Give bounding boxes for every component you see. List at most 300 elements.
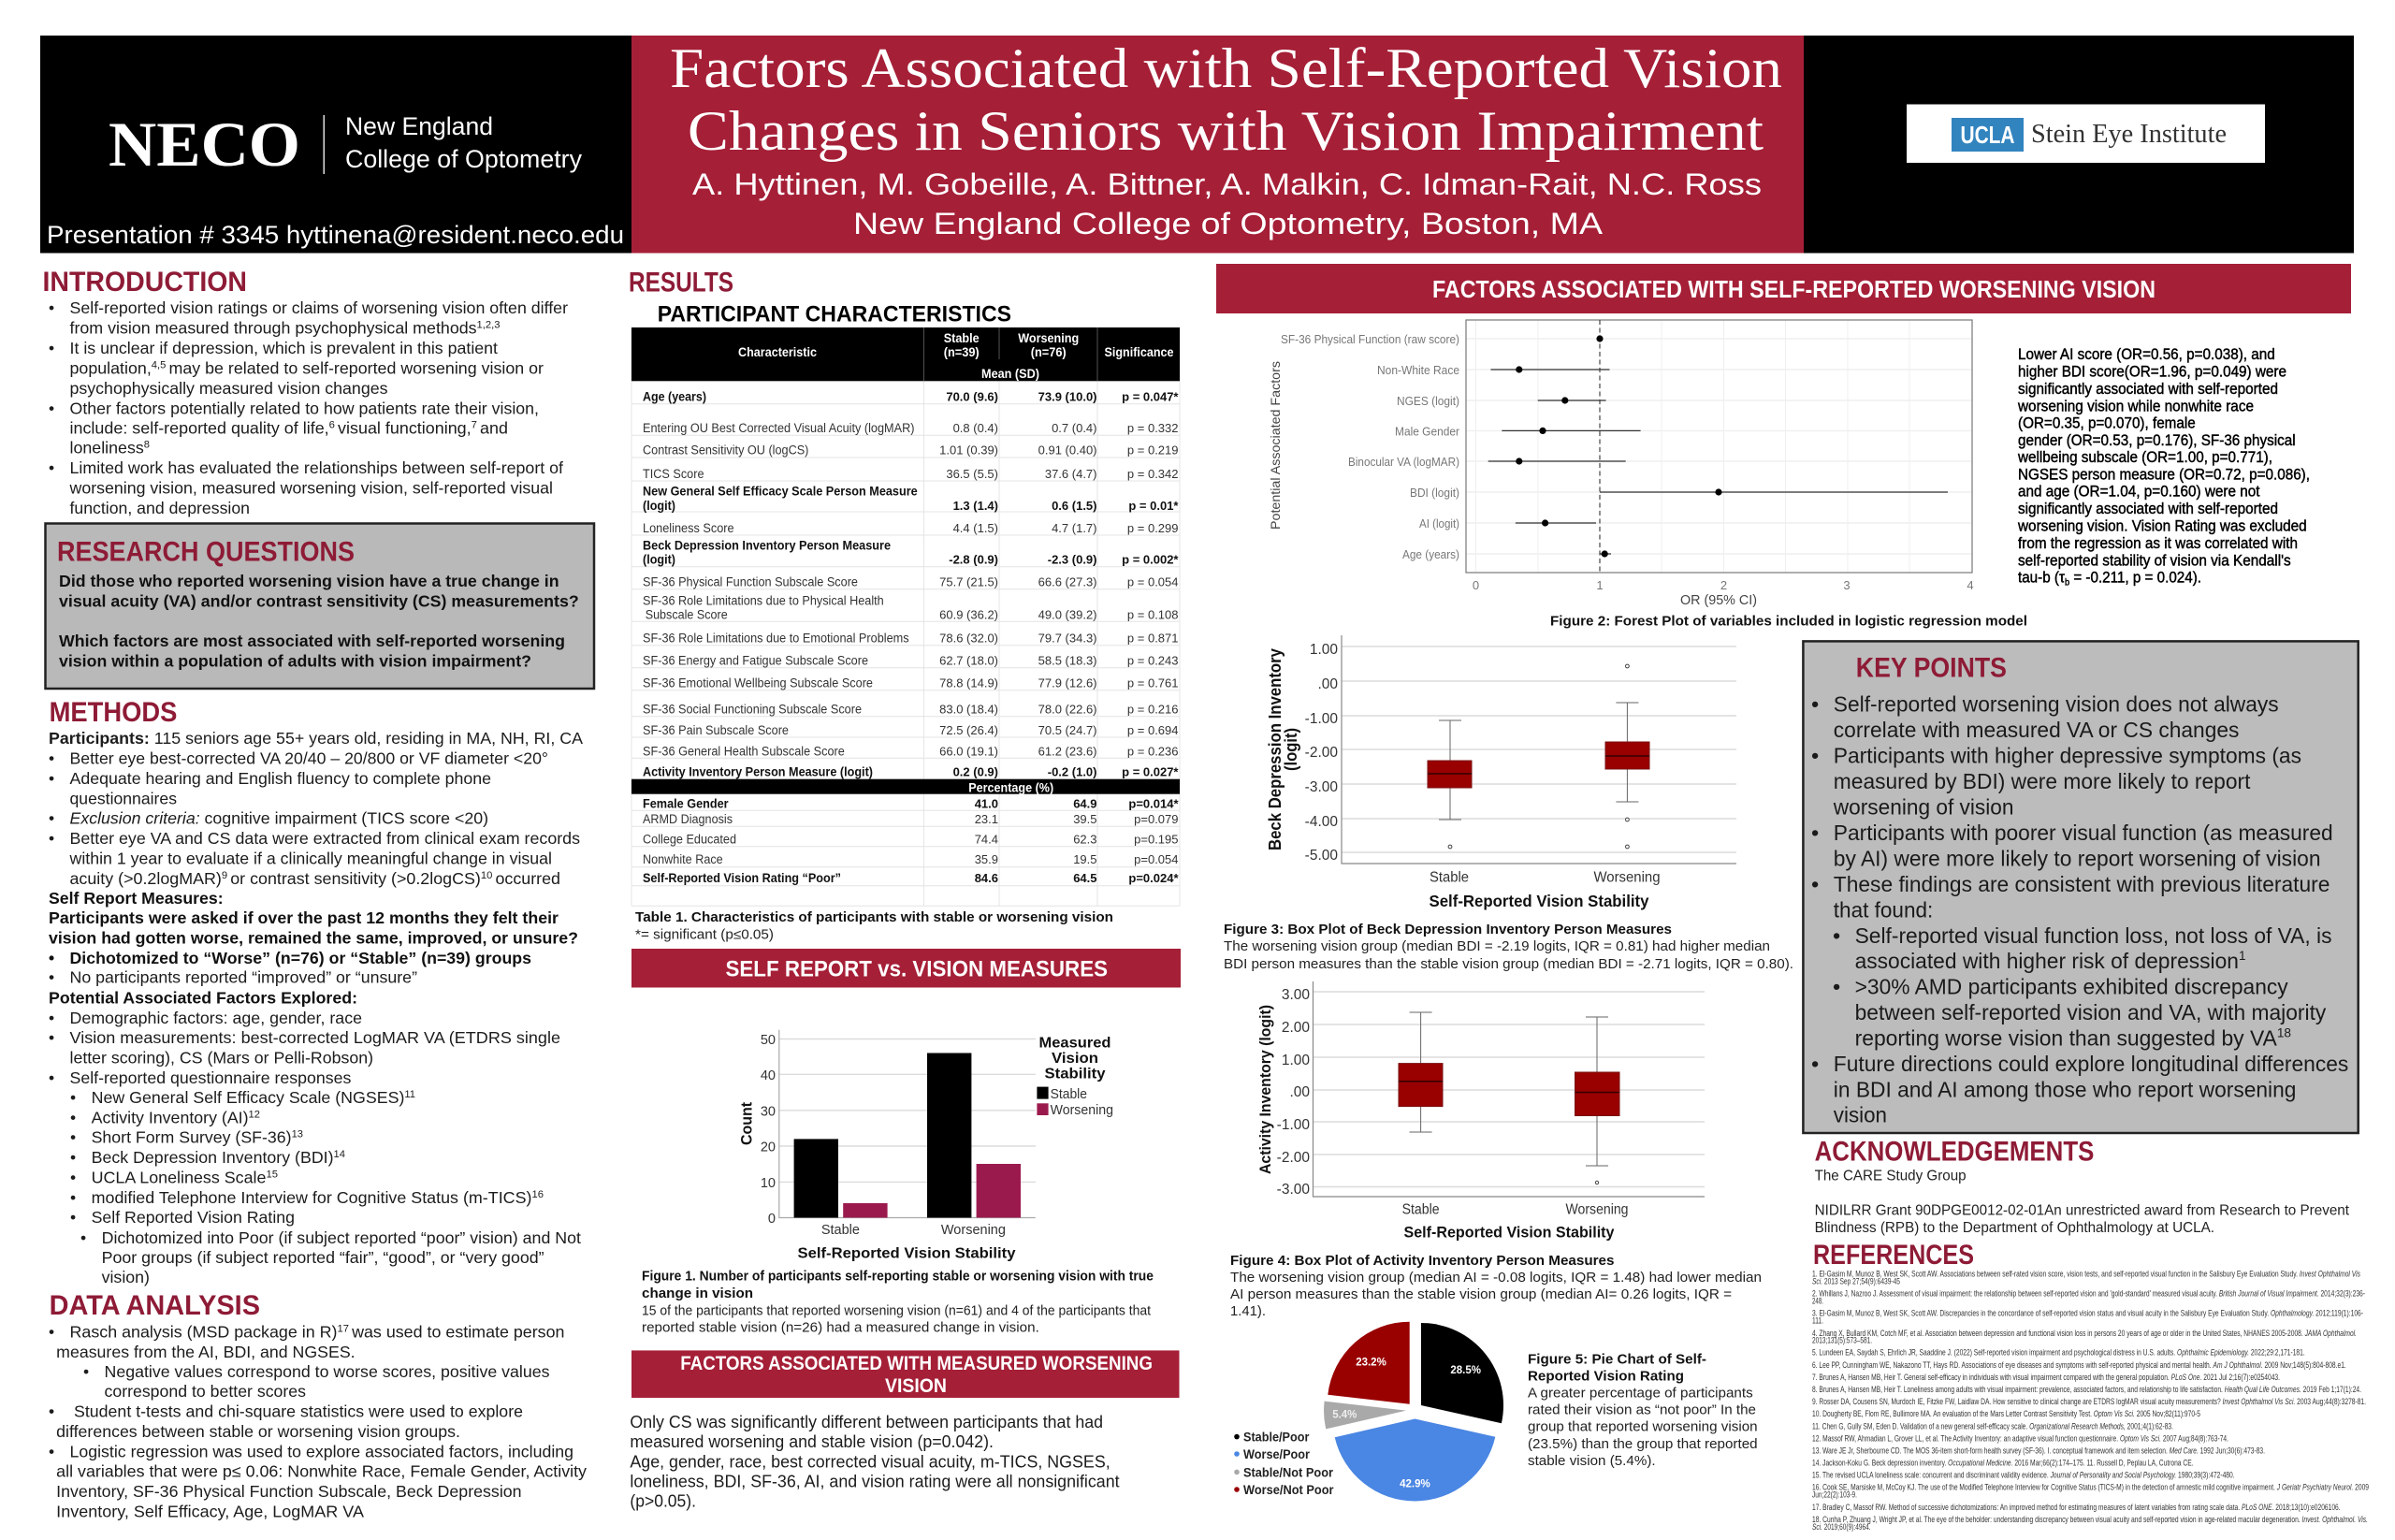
x axis title: Self-Reported Vision Stability bbox=[1403, 1224, 1615, 1241]
factor labels: SF-36 Physical Function (raw score) bbox=[1281, 332, 1459, 346]
banner: factors associated with self-reported worsening vision bbox=[1216, 264, 2351, 313]
methods text: within 1 year to evaluate if a clinically meaningful change in visual bbox=[68, 850, 552, 868]
methods text: • bbox=[49, 769, 54, 788]
table rows: mean values: SF-36 Role Limitations due to Emotional Problems bbox=[643, 631, 909, 645]
figure 4 caption: Figure 4: Box Plot of Activity Inventory Person Measures bbox=[1230, 1254, 1615, 1269]
regression findings text: significantly associated with self-reported bbox=[2018, 501, 2278, 517]
references list: 248. bbox=[1812, 1297, 1823, 1307]
heading: research questions: RESEARCH QUESTIONS bbox=[57, 537, 355, 567]
heading: data analysis: DATA ANALYSIS bbox=[50, 1290, 260, 1321]
key points bullets: between self-reported vision and VA, with majority bbox=[1855, 1000, 2327, 1024]
table rows: mean values: p = 0.219 bbox=[1127, 443, 1179, 458]
x labels: Worsening bbox=[1566, 1201, 1628, 1218]
header banner bbox=[40, 36, 2354, 253]
table rows: percentages: 23.1 bbox=[975, 812, 998, 826]
table rows: mean values: SF-36 Pain Subscale Score bbox=[643, 723, 789, 737]
UCLA Stein Eye Institute logo bbox=[1907, 105, 2265, 163]
table band: percentage: Percentage (%) bbox=[968, 780, 1053, 795]
table rows: mean values: 78.0 (22.6) bbox=[1038, 702, 1096, 716]
methods text: 9 bbox=[222, 870, 230, 881]
data analysis text: differences between stable or worsening vision groups. bbox=[56, 1422, 460, 1441]
table rows: percentages: College Educated bbox=[643, 833, 736, 847]
references list: 14. Jackson-Koku G. Beck depression inventory. Occupational Medicine. 2016 Mar;66(2):174–175. 11. Russell D, Peplau LA, Cutrona CE. bbox=[1812, 1458, 2193, 1468]
figure 4 caption: AI person measures than the stable vision group (median AI= 0.26 logits, IQR = bbox=[1230, 1287, 1732, 1302]
data analysis text: • bbox=[49, 1322, 54, 1341]
methods text: • bbox=[70, 1088, 76, 1107]
table rows: mean values: 70.5 (24.7) bbox=[1038, 723, 1096, 737]
references list: 6. Lee PP, Cunningham WE, Nakazono TT, Hays RD. Associations of eye diseases and symptoms with self-reported physical and mental health. Am J Ophthalmol. 2009 Nov;148(5):804-808.e1. bbox=[1812, 1360, 2346, 1371]
key points bullets: 1 bbox=[2239, 948, 2246, 963]
introduction bullets: psychophysically measured vision changes bbox=[69, 379, 388, 398]
x labels: Stable bbox=[1402, 1201, 1440, 1218]
slice labels: 42.9% bbox=[1400, 1479, 1430, 1490]
UCLA Stein Eye Institute logo: Stein Eye Institute bbox=[2031, 120, 2227, 149]
methods text: • bbox=[70, 1168, 76, 1186]
table rows: percentages: Female Gender bbox=[643, 796, 729, 810]
table rows: mean values: 4.4 (1.5) bbox=[953, 521, 998, 535]
slice labels: 23.2% bbox=[1356, 1358, 1386, 1369]
axis tick labels bbox=[761, 1033, 776, 1227]
factor labels: BDI (logit) bbox=[1410, 486, 1459, 500]
x tick labels: 3 bbox=[1843, 578, 1851, 592]
methods text: • bbox=[70, 1128, 76, 1147]
table rows: percentages: 84.6 bbox=[975, 871, 998, 885]
panel: acknowledgements bbox=[1815, 1137, 2350, 1236]
methods text: occurred bbox=[495, 869, 560, 888]
box: stable bbox=[1428, 720, 1472, 849]
key points bullets: Participants with poorer visual function (as measured bbox=[1834, 821, 2333, 845]
introduction bullets: • bbox=[49, 339, 54, 357]
factor labels: Age (years) bbox=[1402, 547, 1459, 561]
regression findings text: NGSES person measure (OR=0.72, p=0.086), bbox=[2018, 467, 2310, 484]
key points bullets: • bbox=[1811, 692, 1819, 717]
introduction bullets: Self-reported vision ratings or claims of worsening vision often differ bbox=[69, 298, 568, 317]
references list: Sci. 2019;60(9):4964. bbox=[1812, 1522, 1871, 1533]
panel: key points bbox=[1803, 641, 2359, 1133]
table rows: mean values: p = 0.871 bbox=[1127, 631, 1179, 645]
methods text: Dichotomized to “Worse” (n=76) or “Stable” (n=39) groups bbox=[69, 949, 531, 967]
introduction bullets: Other factors potentially related to how patients rate their vision, bbox=[69, 399, 539, 417]
references list: 13. Ware JE Jr, Sherbourne CD. The MOS 36-item short-form health survey (SF-36). I. conceptual framework and item selection. Med Care. 1992 Jun;30(6):473-83. bbox=[1812, 1446, 2265, 1456]
table rows: mean values: p = 0.027* bbox=[1122, 764, 1179, 778]
table rows: mean values: p = 0.054 bbox=[1127, 575, 1179, 589]
banner: self report vs vision measures bbox=[631, 949, 1181, 988]
figure 3 caption: The worsening vision group (median BDI = -2.19 logits, IQR = 0.81) had higher median bbox=[1224, 939, 1770, 954]
category labels: Stable bbox=[821, 1223, 860, 1238]
key points bullets: reporting worse vision than suggested by VA bbox=[1855, 1025, 2288, 1050]
axis title: count: Count bbox=[737, 1102, 756, 1145]
presentation number and email: Presentation # 3345 hyttinena@resident.neco.edu bbox=[47, 221, 624, 249]
measured worsening findings text: Age, gender, race, best corrected visual acuity, m-TICS, NGSES, bbox=[630, 1452, 1110, 1471]
x labels: Worsening bbox=[1594, 870, 1660, 885]
methods text: 14 bbox=[334, 1149, 345, 1160]
heading: introduction: INTRODUCTION bbox=[43, 267, 247, 298]
factor labels: Non-White Race bbox=[1377, 363, 1459, 377]
forest plot bbox=[1268, 320, 1974, 608]
factor labels: Male Gender bbox=[1395, 424, 1460, 438]
introduction bullets: population, bbox=[69, 358, 150, 377]
x tick labels bbox=[1473, 578, 1974, 592]
table rows: mean values: 60.9 (36.2) bbox=[939, 608, 998, 622]
table rows: mean values: 78.8 (14.9) bbox=[939, 676, 998, 690]
heading: acknowledgements: ACKNOWLEDGEMENTS bbox=[1815, 1137, 2094, 1168]
y tick labels: -3.00 bbox=[1305, 779, 1338, 795]
x tick labels: 2 bbox=[1720, 578, 1727, 592]
y tick labels: 1.00 bbox=[1282, 1053, 1310, 1068]
acknowledgements text: Blindness (RPB) to the Department of Ophthalmology at UCLA. bbox=[1815, 1220, 2214, 1236]
methods text: • bbox=[49, 809, 54, 828]
y tick labels bbox=[1277, 987, 1310, 1198]
axis tick labels: 40 bbox=[761, 1068, 776, 1083]
methods text: Self Report Measures: bbox=[49, 889, 224, 908]
acknowledgements text bbox=[1815, 1169, 2350, 1236]
figure 4 caption bbox=[1230, 1254, 1762, 1319]
table rows: mean values: p = 0.332 bbox=[1127, 421, 1179, 435]
references list: 15. The revised UCLA loneliness scale: concurrent and discriminant validity evidence. Journal of Personality and Social Psychology. 1980;39(3):472-480. bbox=[1812, 1470, 2235, 1480]
key points bullets: vision bbox=[1834, 1103, 1887, 1127]
table rows: mean values: p = 0.108 bbox=[1127, 608, 1179, 622]
legend: Vision bbox=[1052, 1051, 1098, 1067]
methods text: No participants reported “improved” or “unsure” bbox=[69, 967, 417, 986]
methods text: Adequate hearing and English fluency to complete phone bbox=[69, 769, 491, 788]
y tick labels: -1.00 bbox=[1305, 711, 1338, 727]
methods text: Beck Depression Inventory (BDI) bbox=[92, 1148, 329, 1167]
references list: Jun;22(2):103-9. bbox=[1812, 1490, 1857, 1501]
regression findings text: wellbeing subscale (OR=1.00, p=0.771), bbox=[2017, 449, 2272, 466]
banner: factors associated with measured worsening vision bbox=[631, 1350, 1179, 1398]
methods text: or contrast sensitivity (>0.2logCS) bbox=[230, 869, 481, 888]
table rows: mean values: 0.7 (0.4) bbox=[1052, 421, 1096, 435]
methods text: UCLA Loneliness Scale bbox=[92, 1168, 262, 1186]
table rows: mean values: -2.8 (0.9) bbox=[949, 553, 998, 567]
references list: 7. Brunes A, Hansen MB, Heir T. General self-efficacy in individuals with visual impairment compared with the general population. PLoS One. 2021 Jul 2;16(7):e0254043. bbox=[1812, 1373, 2280, 1383]
affiliation: New England College of Optometry, Boston, MA bbox=[853, 207, 1604, 240]
table rows: mean values: 0.8 (0.4) bbox=[953, 421, 998, 435]
table header: (n=39) bbox=[944, 344, 980, 359]
methods text: Exclusion criteria: cognitive impairment (TICS score <20) bbox=[69, 809, 488, 828]
heading: references: REFERENCES bbox=[1813, 1240, 1974, 1271]
panel: research questions bbox=[45, 524, 594, 689]
data analysis text: Inventory, SF-36 Physical Function Subscale, Beck Depression bbox=[56, 1482, 522, 1501]
introduction bullets: 8 bbox=[144, 440, 150, 451]
panel: data analysis bbox=[49, 1290, 587, 1520]
slice labels: 5.4% bbox=[1332, 1410, 1357, 1421]
data analysis text: • bbox=[83, 1362, 89, 1381]
banner: self report vs vision measures: SELF REPORT vs. VISION MEASURES bbox=[726, 956, 1108, 981]
methods text: 13 bbox=[292, 1129, 303, 1140]
figure 1 caption: Figure 1. Number of participants self-reporting stable or worsening vision with true bbox=[642, 1270, 1154, 1285]
figure 3 caption: Figure 3: Box Plot of Beck Depression Inventory Person Measures bbox=[1224, 923, 1672, 937]
table caption: Table 1. Characteristics of participants with stable or worsening vision bbox=[635, 910, 1113, 925]
axis title: OR: OR (95% CI) bbox=[1680, 593, 1757, 608]
regression findings text: tau-b (τ bbox=[2018, 569, 2068, 586]
x tick labels: 4 bbox=[1967, 578, 1974, 592]
figure 4 caption: The worsening vision group (median AI = -0.08 logits, IQR = 1.48) had lower median bbox=[1230, 1271, 1762, 1286]
key points bullets bbox=[1811, 692, 2348, 1127]
data analysis text: correspond to better scores bbox=[105, 1382, 306, 1401]
methods text: letter scoring), CS (Mars or Pelli-Robson) bbox=[69, 1049, 373, 1068]
y axis title bbox=[1266, 648, 1300, 850]
research questions text: Which factors are most associated with self-reported worsening bbox=[59, 632, 565, 650]
methods text: Potential Associated Factors Explored: bbox=[49, 988, 357, 1007]
table rows: mean values: SF-36 Emotional Wellbeing Subscale Score bbox=[643, 676, 873, 690]
panel: methods bbox=[49, 697, 583, 1286]
key points bullets: 18 bbox=[2277, 1025, 2291, 1040]
table rows: mean values: p = 0.216 bbox=[1127, 702, 1179, 716]
banner: factors associated with measured worsening vision: FACTORS ASSOCIATED WITH MEASURED WORSENING bbox=[680, 1353, 1153, 1374]
table header bbox=[631, 327, 1180, 381]
methods text: Participants were asked if over the past 12 months they felt their bbox=[49, 908, 559, 927]
y tick labels: .00 bbox=[1317, 676, 1338, 692]
introduction bullets: include: self-reported quality of life, bbox=[69, 418, 323, 437]
methods text: acuity (>0.2logMAR) bbox=[69, 869, 219, 888]
key points bullets: correlate with measured VA or CS changes bbox=[1834, 718, 2239, 742]
research questions text: visual acuity (VA) and/or contrast sensitivity (CS) measurements? bbox=[59, 591, 579, 610]
key points bullets: • bbox=[1811, 1052, 1819, 1076]
methods text: 12 bbox=[249, 1110, 260, 1121]
table rows: mean values: TICS Score bbox=[643, 467, 704, 481]
table rows: mean values: SF-36 Physical Function Subscale Score bbox=[643, 575, 858, 589]
figure 1 caption: reported stable vision (n=26) had a measured change in vision. bbox=[642, 1321, 1039, 1336]
references list: 2. Whillans J, Nazroo J. Assessment of visual impairment: the relationship between self-reported vision and 'gold-standard' measured visual acuity. British Journal of Visual Impairment. 2014;32(3):236- bbox=[1812, 1289, 2365, 1300]
table rows: mean values: Activity Inventory Person Measure (logit) bbox=[643, 764, 873, 778]
references list: Sci. 2013 Sep 27;54(9):6439-45 bbox=[1812, 1276, 1900, 1286]
key points bullets: measured by BDI) were more likely to report bbox=[1834, 769, 2251, 793]
figure 5 caption: stable vision (5.4%). bbox=[1528, 1454, 1656, 1469]
box: worsening bbox=[1575, 1017, 1619, 1184]
research questions text: Did those who reported worsening vision have a true change in bbox=[59, 572, 559, 590]
table header: Worsening bbox=[1018, 330, 1079, 345]
methods text: • bbox=[70, 1208, 76, 1227]
table rows: percentages: 62.3 bbox=[1073, 833, 1096, 847]
slice labels: 28.5% bbox=[1450, 1365, 1481, 1376]
y tick labels: 2.00 bbox=[1282, 1020, 1310, 1036]
axis title: potential associated factors: Potential Associated Factors bbox=[1268, 361, 1283, 530]
key points bullets: These findings are consistent with previous literature bbox=[1834, 872, 2330, 896]
table rows: mean values: 73.9 (10.0) bbox=[1038, 390, 1096, 404]
figure 4 caption: 1.41). bbox=[1230, 1304, 1266, 1319]
axis tick labels: 20 bbox=[761, 1140, 776, 1155]
table rows: percentages bbox=[643, 796, 1179, 885]
measured worsening findings text: loneliness, BDI, SF-36, AI, and vision rating were all nonsignificant bbox=[630, 1473, 1120, 1491]
table header: Characteristic bbox=[738, 344, 817, 359]
box: stable bbox=[1399, 1012, 1443, 1132]
figure 1 caption: change in vision bbox=[642, 1286, 753, 1301]
data analysis text: Rasch analysis (MSD package in R) bbox=[69, 1322, 332, 1341]
key points bullets: Self-reported worsening vision does not always bbox=[1834, 692, 2279, 717]
heading: methods: METHODS bbox=[50, 697, 177, 728]
methods text: 11 bbox=[404, 1089, 415, 1100]
introduction bullets: loneliness bbox=[69, 439, 142, 458]
table rows: percentages: Self-Reported Vision Rating “Poor” bbox=[643, 871, 841, 885]
table rows: mean values: 75.7 (21.5) bbox=[939, 575, 998, 589]
key points bullets: Future directions could explore longitudinal differences bbox=[1834, 1052, 2348, 1076]
measured worsening findings text bbox=[630, 1413, 1120, 1511]
methods text: • bbox=[49, 1028, 54, 1047]
methods text: • bbox=[70, 1188, 76, 1207]
regression findings text: worsening vision while nonwhite race bbox=[2017, 398, 2254, 414]
y tick labels: -1.00 bbox=[1277, 1117, 1310, 1133]
table rows: mean values: p = 0.761 bbox=[1127, 676, 1179, 690]
authors: A. Hyttinen, M. Gobeille, A. Bittner, A. Malkin, C. Idman-Rait, N.C. Ross bbox=[692, 167, 1762, 201]
regression findings text: (OR=0.35, p=0.070), female bbox=[2018, 415, 2196, 432]
data analysis text: was used to estimate person bbox=[351, 1322, 565, 1341]
methods text: • bbox=[49, 829, 54, 848]
data analysis text: Inventory, Self Efficacy, Age, LogMAR VA bbox=[56, 1502, 364, 1520]
methods text bbox=[49, 729, 583, 1286]
table rows: percentages: 39.5 bbox=[1073, 812, 1096, 826]
y tick labels: -4.00 bbox=[1305, 814, 1338, 830]
NECO logo: New England bbox=[345, 112, 493, 140]
regression findings text: b bbox=[2065, 578, 2069, 588]
legend: Stable bbox=[1051, 1087, 1087, 1102]
table rows: mean values: 49.0 (39.2) bbox=[1038, 608, 1096, 622]
table rows: percentages: p=0.079 bbox=[1134, 812, 1179, 826]
axis tick labels: 30 bbox=[761, 1104, 776, 1119]
NECO logo: NECO bbox=[109, 109, 300, 180]
methods text: Self Reported Vision Rating bbox=[92, 1208, 295, 1227]
table rows: mean values: p = 0.694 bbox=[1127, 723, 1179, 737]
methods text: • bbox=[49, 949, 54, 967]
measured worsening findings text: measured worsening and stable vision (p=0.042). bbox=[630, 1432, 994, 1451]
key points bullets: associated with higher risk of depression bbox=[1855, 949, 2251, 973]
regression findings text: higher BDI score(OR=1.96, p=0.049) were bbox=[2018, 363, 2286, 380]
y axis title: Beck Depression Inventory bbox=[1266, 648, 1285, 850]
introduction bullets bbox=[49, 298, 568, 517]
methods text: Activity Inventory (AI) bbox=[92, 1109, 246, 1127]
table rows: mean values: 83.0 (18.4) bbox=[939, 702, 998, 716]
introduction bullets: and bbox=[480, 418, 508, 437]
key points bullets: • bbox=[1811, 872, 1819, 896]
figure 1 caption: 15 of the participants that reported worsening vision (n=61) and 4 of the participants that bbox=[642, 1304, 1151, 1319]
table rows: mean values: p = 0.243 bbox=[1127, 654, 1179, 668]
table rows: percentages: 19.5 bbox=[1073, 852, 1096, 866]
methods text: Short Form Survey (SF-36) bbox=[92, 1128, 289, 1147]
legend: Measured bbox=[1038, 1036, 1111, 1052]
box: worsening bbox=[1605, 664, 1649, 849]
regression findings text: significantly associated with self-reported bbox=[2018, 381, 2278, 398]
slice labels bbox=[1332, 1358, 1481, 1490]
figure 5 caption bbox=[1528, 1352, 1758, 1469]
x labels bbox=[1402, 1201, 1628, 1218]
table header: Stable bbox=[944, 330, 980, 345]
figure 5 caption: group that reported worsening vision bbox=[1528, 1420, 1758, 1435]
table rows: mean values: Contrast Sensitivity OU (logCS) bbox=[643, 443, 808, 458]
data analysis text: • bbox=[49, 1443, 54, 1461]
key points bullets: • bbox=[1833, 975, 1840, 999]
table rows: mean values: 37.6 (4.7) bbox=[1045, 467, 1096, 481]
legend: Worse/Poor bbox=[1243, 1447, 1311, 1461]
references list: 5. Lundeen EA, Saydah S, Ehrlich JR, Saaddine J. (2022) Self-reported vision impairment and psychological distress in U.S. adults. Ophthalmic Epidemiology. 2022;29:2,171-181. bbox=[1812, 1348, 2305, 1358]
methods text: Self-reported questionnaire responses bbox=[69, 1068, 352, 1087]
methods text: Vision measurements: best-corrected LogMAR VA (ETDRS single bbox=[69, 1028, 560, 1047]
introduction bullets: from vision measured through psychophysical methods bbox=[69, 319, 470, 338]
regression findings text: gender (OR=0.53, p=0.176), SF-36 physical bbox=[2018, 432, 2296, 449]
table rows: mean values: 72.5 (26.4) bbox=[939, 723, 998, 737]
table rows: mean values: 0.2 (0.9) bbox=[953, 764, 998, 778]
table rows: mean values: Subscale Score bbox=[646, 608, 728, 622]
factor labels bbox=[1281, 332, 1460, 561]
regression findings text: worsening vision. Vision Rating was excluded bbox=[2017, 518, 2307, 535]
y tick labels: .00 bbox=[1289, 1084, 1310, 1100]
poster title bbox=[670, 37, 1782, 162]
y tick labels: 3.00 bbox=[1282, 987, 1310, 1003]
table rows: mean values: 79.7 (34.3) bbox=[1038, 631, 1096, 645]
data analysis text: measures from the AI, BDI, and NGSES. bbox=[56, 1343, 356, 1361]
axis tick labels: 50 bbox=[761, 1033, 776, 1048]
regression findings text bbox=[2017, 346, 2310, 588]
table rows: mean values: Beck Depression Inventory Person Measure bbox=[643, 538, 891, 552]
regression findings text: self-reported stability of vision via Kendall's bbox=[2018, 552, 2291, 569]
panel: references bbox=[1812, 1240, 2369, 1533]
introduction bullets: It is unclear if depression, which is prevalent in this patient bbox=[69, 339, 498, 357]
figure 5 caption: A greater percentage of participants bbox=[1528, 1387, 1753, 1402]
table rows: mean values bbox=[643, 390, 1179, 778]
bars bbox=[794, 1053, 1021, 1218]
box plot: Activity Inventory bbox=[1256, 981, 1705, 1241]
factor labels: Binocular VA (logMAR) bbox=[1348, 455, 1459, 469]
regression findings text: Lower AI score (OR=0.56, p=0.038), and bbox=[2018, 346, 2275, 363]
y tick labels: -2.00 bbox=[1305, 745, 1338, 761]
table rows: mean values: 62.7 (18.0) bbox=[939, 654, 998, 668]
figure 1 caption bbox=[642, 1270, 1154, 1336]
introduction bullets: 1,2,3 bbox=[477, 320, 500, 331]
references list: 2013;131(5):573–581. bbox=[1812, 1336, 1872, 1346]
key points bullets: Participants with higher depressive symptoms (as bbox=[1834, 743, 2301, 767]
methods text: • bbox=[49, 1068, 54, 1087]
subheading: participant characteristics: PARTICIPANT CHARACTERISTICS bbox=[658, 301, 1011, 327]
table rows: percentages: p=0.024* bbox=[1128, 871, 1179, 885]
factor labels: NGES (logit) bbox=[1397, 394, 1459, 408]
table header: (n=76) bbox=[1031, 344, 1067, 359]
methods text: New General Self Efficacy Scale (NGSES) bbox=[92, 1088, 399, 1107]
pie chart: self-reported vision rating bbox=[1234, 1322, 1503, 1501]
table rows: percentages: p=0.195 bbox=[1134, 833, 1179, 847]
introduction bullets: • bbox=[49, 399, 54, 417]
heading: results: RESULTS bbox=[629, 268, 733, 298]
introduction bullets: • bbox=[49, 458, 54, 477]
key points bullets: • bbox=[1811, 743, 1819, 767]
table rows: percentages: p=0.014* bbox=[1128, 796, 1179, 810]
poster title: Factors Associated with Self-Reported Vision bbox=[670, 37, 1782, 99]
NECO logo: College of Optometry bbox=[345, 145, 582, 173]
table rows: percentages: 41.0 bbox=[975, 796, 998, 810]
legend bbox=[1037, 1036, 1113, 1118]
research questions text bbox=[59, 572, 579, 670]
data analysis text: • bbox=[49, 1402, 54, 1421]
table rows: mean values: Entering OU Best Corrected Visual Acuity (logMAR) bbox=[643, 421, 915, 435]
x tick labels: 1 bbox=[1596, 578, 1604, 592]
references list: 10. Dougherty BE, Flom RE, Bullimore MA. An evaluation of the Mars Letter Contrast Sensitivity Test. Optom Vis Sci. 2005 Nov;82(11):970-5 bbox=[1812, 1409, 2200, 1419]
table rows: mean values: 61.2 (23.6) bbox=[1038, 744, 1096, 758]
axis tick labels: 10 bbox=[761, 1176, 776, 1191]
table rows: percentages: 64.5 bbox=[1073, 871, 1096, 885]
table rows: mean values: 1.01 (0.39) bbox=[939, 443, 998, 458]
table rows: percentages: Nonwhite Race bbox=[643, 852, 723, 866]
table rows: mean values: p = 0.002* bbox=[1122, 553, 1179, 567]
references list: 11. Chen G, Gully SM, Eden D. Validation of a new general self-efficacy scale. Organizational Research Methods, 2001;4(1):62-83. bbox=[1812, 1421, 2173, 1431]
key points bullets: • bbox=[1833, 923, 1840, 948]
introduction bullets: • bbox=[49, 298, 54, 317]
methods text: Poor groups (if subject reported “fair”, “good”, or “very good” bbox=[102, 1248, 544, 1267]
key points bullets: >30% AMD participants exhibited discrepancy bbox=[1855, 975, 2288, 999]
banner: factors associated with measured worsening vision: VISION bbox=[885, 1375, 947, 1397]
panel: introduction bbox=[43, 267, 568, 517]
methods text: questionnaires bbox=[69, 789, 177, 807]
introduction bullets: 4,5 bbox=[152, 359, 168, 370]
table rows: mean values: (logit) bbox=[643, 553, 675, 567]
key points bullets: worsening of vision bbox=[1833, 795, 2013, 820]
